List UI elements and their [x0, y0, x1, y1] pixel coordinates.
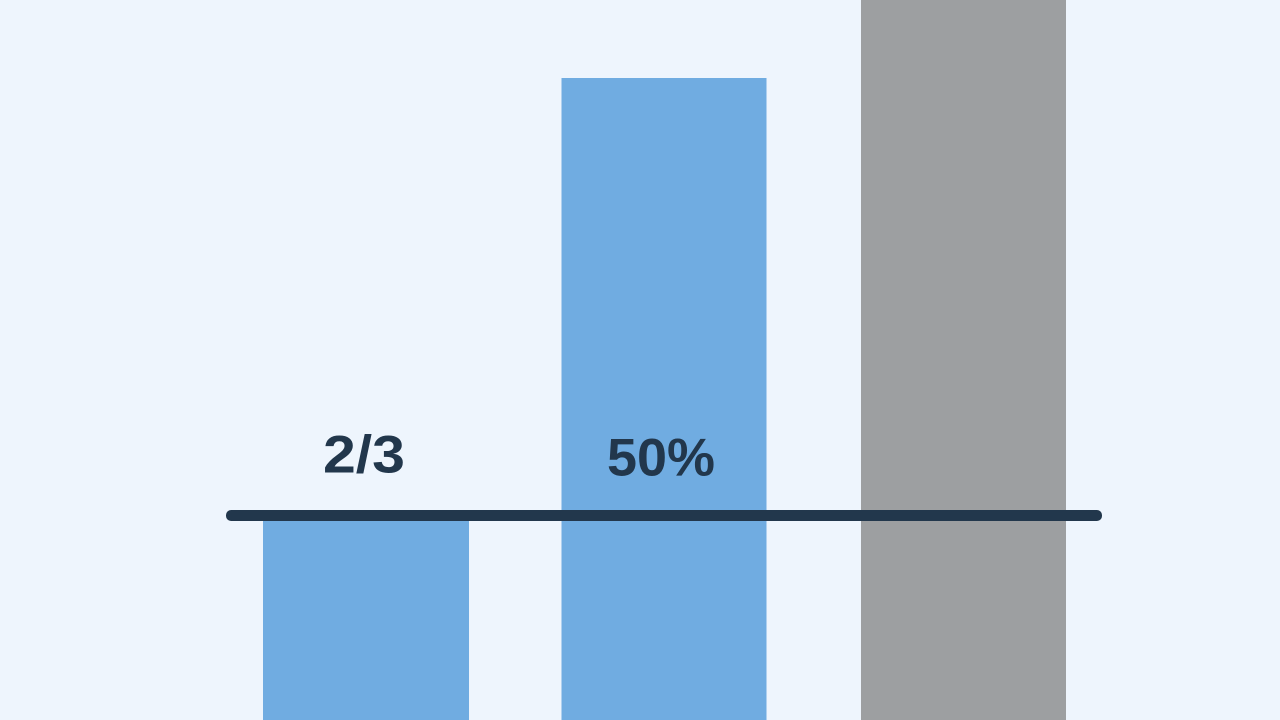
label: 2/3: 2/3 — [323, 426, 405, 484]
label: 50%: 50% — [607, 428, 715, 488]
bar: right gray — [861, 0, 1066, 720]
bar: middle blue — [562, 78, 766, 720]
baseline — [226, 510, 1102, 521]
bar: left blue — [263, 516, 469, 720]
